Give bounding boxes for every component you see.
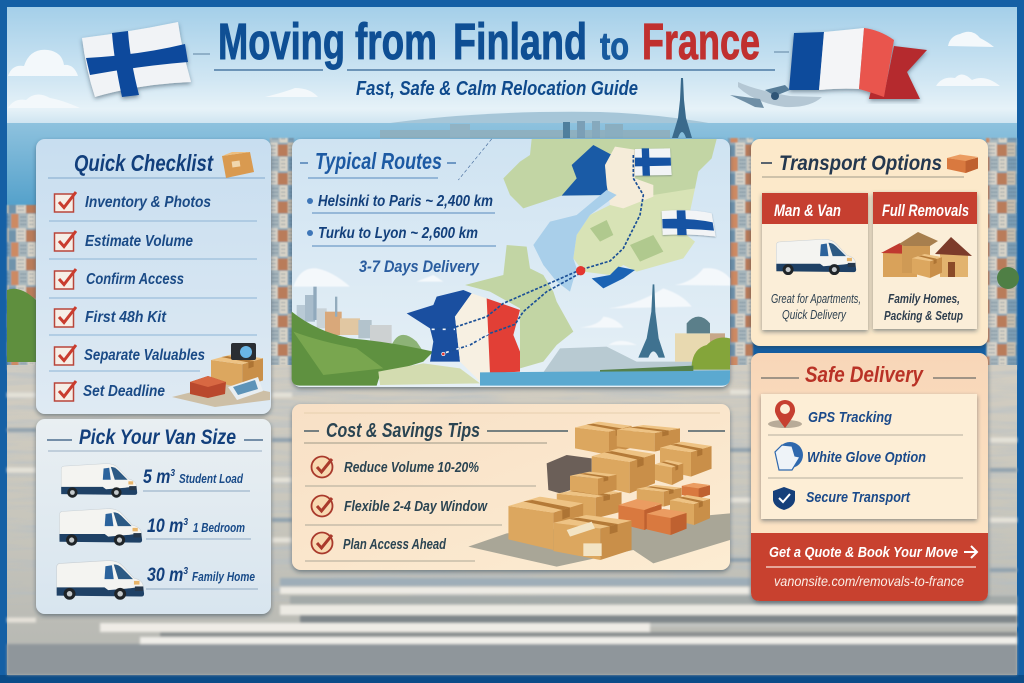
Finland land [573, 188, 695, 275]
title: Moving from Finland to France: Moving [218, 13, 345, 70]
tip: Plan Access Ahead: Plan Access Ahead [343, 536, 447, 553]
heading: Pick Your Van Size: Pick Your Van Size [79, 426, 236, 449]
heading: Transport Options: Transport Options [779, 152, 942, 175]
green hill [292, 312, 433, 386]
feature: GPS Tracking [768, 400, 892, 428]
sky background [7, 7, 1017, 127]
route text 1 [307, 193, 495, 213]
label: 30 m3 Family Home: 30 m [147, 565, 190, 586]
label: 5 m3 Student Load: 5 m [143, 467, 176, 488]
label: 10 m3 1 Bedroom: 3 [183, 517, 188, 528]
tip: Reduce Volume [312, 456, 479, 478]
icon: arrow [964, 546, 977, 558]
city backdrop centre right [728, 138, 753, 370]
item: Confirm Access [54, 269, 184, 289]
label: 10 m3 1 Bedroom: 10 m [147, 516, 190, 537]
ground streak texture [7, 365, 1017, 605]
flag on map top [635, 148, 672, 176]
title: Moving from Finland to France: Finland [453, 13, 587, 70]
row dividers [49, 221, 257, 371]
Finnish south coast [592, 267, 635, 288]
heading rules [761, 377, 976, 379]
panel: safe delivery [751, 353, 988, 601]
illustration: stack of moving boxes [468, 422, 730, 567]
title underline [214, 69, 775, 71]
marker: Lyon [442, 352, 445, 356]
card title: Full Removals [882, 201, 969, 220]
icon: parcel [222, 152, 254, 178]
Baltic sea [533, 190, 617, 292]
tip: Plan Access Ahead [312, 532, 447, 554]
France blue [407, 290, 472, 362]
France white [455, 293, 490, 382]
flag on map second [662, 210, 716, 237]
city on map left [297, 287, 423, 352]
trees right [990, 366, 1017, 412]
call to action banner [751, 533, 988, 601]
label: 10 m3 1 Bedroom: 1 Bedroom [193, 520, 245, 535]
tip: Flexible window: Flexible 2-4 Day Window [344, 498, 488, 515]
icon: Eiffel tower [672, 78, 692, 138]
city backdrop centre left [270, 138, 294, 370]
label: 30 m3 Family Home: 3 [183, 566, 188, 577]
CTA text: Get a Quote & Book Your Move [769, 544, 958, 561]
city skyline [380, 121, 670, 138]
van: 30 m3 [44, 561, 165, 600]
item: Set Deadline [54, 381, 165, 401]
panel: typical routes [292, 139, 730, 387]
item: Inventory & Photos [54, 192, 211, 212]
heading: Safe Delivery: Safe Delivery [805, 362, 925, 387]
route text 2: Turku to Lyon ~ 2,600 km [318, 225, 478, 242]
dark bin [547, 455, 592, 493]
item: Confirm Access: Confirm Access [86, 271, 184, 288]
rule under heading [304, 442, 547, 444]
heading underline [308, 177, 438, 179]
card description: Quick Delivery [782, 308, 847, 322]
road ground [7, 365, 1017, 675]
feature: GPS Tracking: GPS Tracking [808, 409, 892, 426]
heading dash [761, 162, 772, 164]
city backdrop right [986, 138, 1017, 370]
card description: Packing & Setup [884, 308, 963, 323]
item: First 48h Kit [54, 307, 167, 327]
northern land [503, 139, 717, 208]
route: Helsinki to Paris [432, 155, 643, 329]
palace [675, 317, 725, 362]
van: 10 m3 [46, 509, 150, 546]
route: Turku to Lyon [443, 273, 580, 353]
rule under heading [762, 176, 964, 178]
item: Separate Valuables: Separate Valuables [84, 347, 205, 364]
panel: cost and savings tips [292, 404, 730, 570]
icon: France flag [789, 28, 927, 99]
feature: Secure Transport: Secure Transport [806, 489, 911, 506]
shore trees [600, 366, 693, 372]
boxes [508, 422, 712, 560]
map: Europe routes [292, 139, 730, 386]
distant horizon hills [370, 112, 720, 138]
route text 1: Helsinki to Paris ~ 2,400 km [318, 193, 493, 210]
road surface texture [7, 392, 1017, 675]
card: Full Removals [873, 192, 977, 329]
card: Man & Van [762, 193, 868, 330]
icon: white van [776, 239, 856, 275]
trees left [7, 289, 36, 362]
subtitle: Fast, Safe & Calm Relocation Guide [356, 78, 638, 100]
icon: airplane [730, 82, 822, 108]
top rule [304, 412, 720, 414]
illustration: valuables pile [172, 343, 270, 407]
tip: Flexible window [312, 496, 488, 516]
floor mats [468, 513, 730, 567]
central Europe land [465, 245, 573, 368]
hill highlights [293, 332, 383, 375]
title block [193, 13, 789, 100]
heading rules [304, 430, 725, 432]
Eiffel tower on map [638, 284, 665, 358]
card description [884, 291, 963, 323]
sea band [7, 123, 1017, 213]
title: Moving from Finland to France [218, 13, 760, 70]
heading: Cost & Savings Tips: Cost & Savings Tips [326, 420, 480, 442]
bottom frame edge [0, 675, 1024, 683]
trees on map [692, 337, 730, 370]
tip: Reduce Volume: Reduce Volume 10-20% [344, 459, 479, 476]
title: Moving from Finland to France: France [642, 13, 760, 70]
heading dashes [300, 162, 456, 164]
panel: pick your van size [36, 419, 271, 614]
thin dashed line [458, 139, 492, 180]
URL: vanonsite.com/removals-to-france [774, 573, 964, 589]
heading: Typical Routes: Typical Routes [315, 148, 442, 174]
card description: Family Homes, [888, 291, 960, 306]
title dashes [193, 52, 789, 54]
icon: open box [947, 154, 978, 173]
item: Estimate Volume: Estimate Volume [85, 233, 193, 250]
van: 5 m3 [46, 464, 140, 498]
marker: hub [576, 266, 585, 275]
heading rules [47, 439, 263, 441]
route white dots [432, 329, 488, 353]
heading rule [48, 177, 265, 179]
feature: White Glove Option: White Glove Option [807, 449, 926, 466]
card description [771, 292, 861, 322]
item: First 48h Kit: First 48h Kit [85, 309, 167, 326]
delivery time: 3-7 Days Delivery [359, 257, 480, 276]
card header [873, 192, 977, 224]
box labels [567, 522, 602, 556]
label: 30 m3 Family Home: Family Home [192, 569, 255, 584]
feature rules [768, 435, 963, 478]
panel: transport options [751, 139, 988, 346]
label: 30 m3 Family Home [146, 565, 258, 589]
southern land [378, 363, 480, 385]
pale corridor [605, 147, 653, 208]
title: Moving from Finland to France: to [600, 26, 629, 68]
clouds in sky [8, 32, 1000, 108]
card description: Great for Apartments, [771, 292, 861, 306]
item: Inventory & Photos: Inventory & Photos [85, 194, 211, 211]
rule under heading [48, 450, 262, 452]
label: 5 m3 Student Load [143, 467, 250, 491]
feature: Secure Transport [773, 487, 911, 510]
row rules [305, 486, 536, 561]
panel: quick checklist [36, 139, 271, 414]
heading: Quick Checklist: Quick Checklist [74, 150, 214, 176]
title: Moving from Finland to France: from [355, 13, 437, 70]
inland green [590, 220, 663, 262]
city backdrop left [7, 205, 37, 370]
clouds on map [293, 268, 730, 345]
blue land highlight [562, 145, 615, 196]
item: Set Deadline: Set Deadline [83, 383, 165, 400]
label: 5 m3 Student Load: Student Load [179, 471, 244, 486]
card header [762, 193, 868, 224]
icon: houses and boxes [881, 232, 972, 278]
label: 10 m3 1 Bedroom [146, 516, 251, 539]
label: 5 m3 Student Load: 3 [170, 468, 175, 479]
feature: White Glove Option [775, 442, 926, 470]
card title: Man & Van [774, 201, 841, 220]
CTA rule [766, 566, 976, 568]
item: Separate Valuables [54, 345, 205, 365]
France red [487, 298, 520, 373]
far coast [543, 347, 730, 372]
trees right upper [997, 267, 1019, 289]
item: Estimate Volume [54, 231, 193, 251]
feature card [761, 394, 977, 519]
icon: Finland flag [82, 22, 191, 97]
sea [480, 370, 730, 386]
